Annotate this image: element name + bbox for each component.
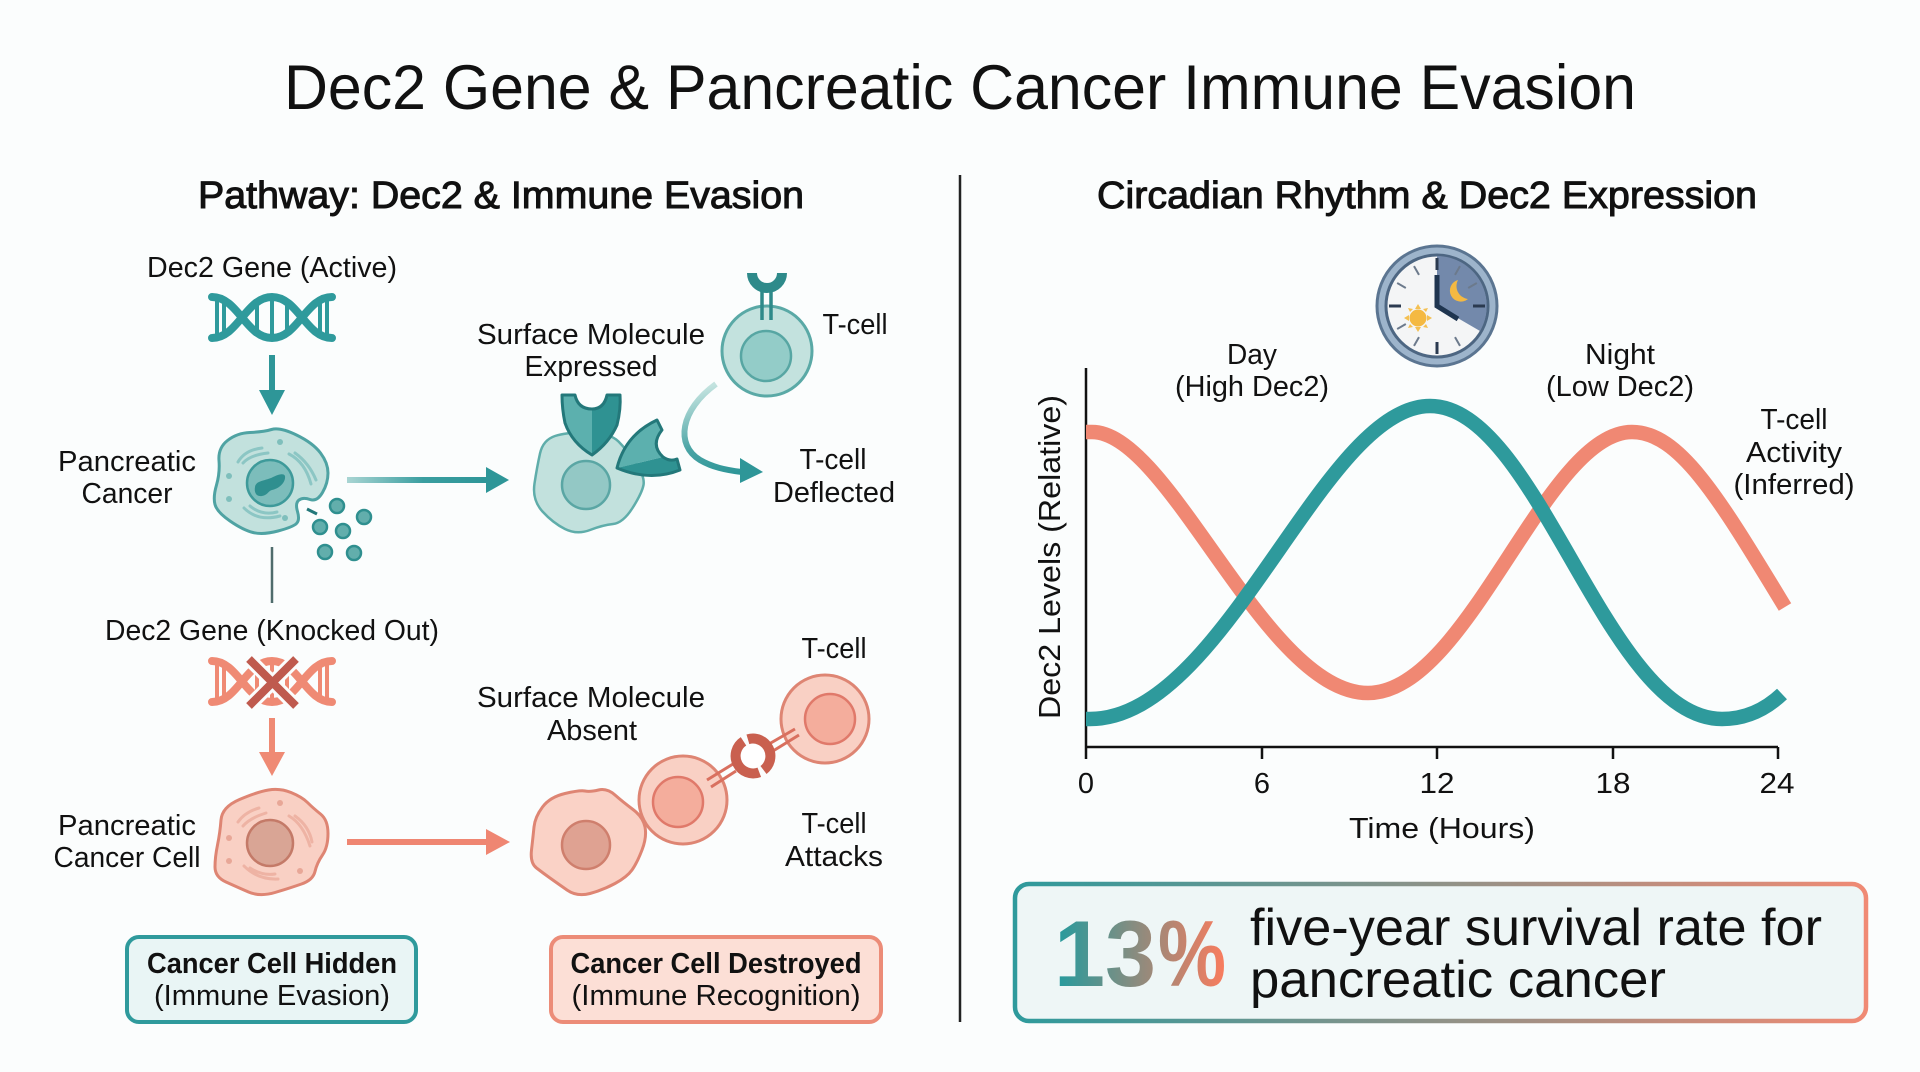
label: pancreatic cancer: Cancer [82,478,173,510]
label: day [1175,339,1329,403]
label: T-cell activity: (Inferred) [1734,469,1854,501]
label: T-cell attacks: Attacks [785,841,883,873]
x axis label: Time (Hours) [1349,813,1535,845]
label: day: (High Dec2) [1175,371,1329,403]
label: surface molecule expressed [477,319,705,383]
icon: T-cell with receptor [722,273,812,396]
curve: Dec2 [1086,406,1782,719]
label: T-cell attacks [785,808,883,873]
icon: coral pancreatic cancer cell [215,789,328,895]
y axis label: Dec2 Levels (Relative) [1032,395,1067,719]
label: T-cell deflected: T-cell [800,444,866,476]
label: surface molecule absent [477,682,705,747]
statistic: % [1158,901,1226,1006]
statistic [1054,901,1226,1006]
label: night: Night [1585,339,1655,371]
x axis tick labels: 24 [1760,768,1794,800]
label: pancreatic cancer cell [54,810,200,874]
label: surface molecule absent: Surface Molecule [477,682,705,714]
line chart: Dec2 and T-cell curves [1032,368,1794,845]
label: night [1546,339,1694,403]
icon: pancreatic cancer cell secreting vesicles [214,429,371,560]
curve: T-cell activity [1086,432,1785,693]
callout: 13% survival [1015,884,1866,1021]
icon: day-night clock [1377,246,1497,366]
label: T-cell: T-cell [822,309,888,341]
statistic description: five-year survival rate for [1250,899,1822,957]
label: pancreatic cancer cell: Pancreatic [58,810,196,842]
callout: cancer cell destroyed: Cancer Cell Destroyed [570,948,862,980]
statistic description: pancreatic cancer [1250,951,1666,1009]
x axis tick labels: 18 [1596,768,1630,800]
axes [1086,368,1778,759]
label: T-cell attacks: T-cell [802,808,866,840]
label: pancreatic cancer [58,446,196,510]
arrow: deflection [684,384,763,483]
label: surface molecule absent: Absent [547,715,637,747]
icon: DNA active [212,297,332,338]
label: T-cell top: T-cell [802,633,866,665]
callout: cancer cell destroyed [551,937,881,1022]
icon: DNA knocked out [212,659,332,706]
arrow: knocked out gene to cell [259,718,285,776]
callout: cancer cell destroyed: (Immune Recognition) [572,980,860,1012]
title: Dec2 Gene & Pancreatic Cancer Immune Evasion [284,53,1636,123]
label: T-cell deflected: Deflected [773,477,895,509]
callout: cancer cell hidden: (Immune Evasion) [154,980,390,1012]
panel: circadian rhythm [1015,175,1866,1021]
label: T-cell activity [1734,404,1854,501]
label: Dec2 gene knocked out: Dec2 Gene (Knocked Out) [105,615,439,647]
label: pancreatic cancer cell: Cancer Cell [54,842,200,874]
connector: active to knocked out [271,547,273,603]
x axis tick labels: 0 [1078,768,1094,800]
label: T-cell activity: T-cell [1760,404,1828,436]
heading: circadian: Circadian Rhythm & Dec2 Expression [1097,175,1757,217]
callout: cancer cell hidden: Cancer Cell Hidden [147,948,397,980]
statistic: 13 [1054,901,1156,1006]
label: day: Day [1227,339,1277,371]
label: surface molecule expressed: Expressed [524,351,658,383]
label: pancreatic cancer: Pancreatic [58,446,196,478]
icon: cell with surface molecules [534,395,680,532]
arrow: cancer to surface molecule [347,467,509,493]
label: night: (Low Dec2) [1546,371,1694,403]
arrow: gene to cancer [259,355,285,415]
label: surface molecule expressed: Surface Molecule [477,319,705,351]
panel: pathway [54,175,895,1022]
label: T-cell activity: Activity [1746,437,1843,469]
icon: cancer cell attacked by T-cells [531,675,869,895]
arrow: coral cell to absent [347,829,510,855]
callout: cancer cell hidden [127,937,416,1022]
label: T-cell deflected [773,444,895,509]
statistic description [1250,899,1822,1009]
x axis tick labels: 12 [1420,768,1454,800]
x axis tick labels [1078,768,1794,800]
heading: pathway: Pathway: Dec2 & Immune Evasion [198,175,804,217]
x axis tick labels: 6 [1254,768,1270,800]
label: Dec2 gene active: Dec2 Gene (Active) [147,252,397,284]
